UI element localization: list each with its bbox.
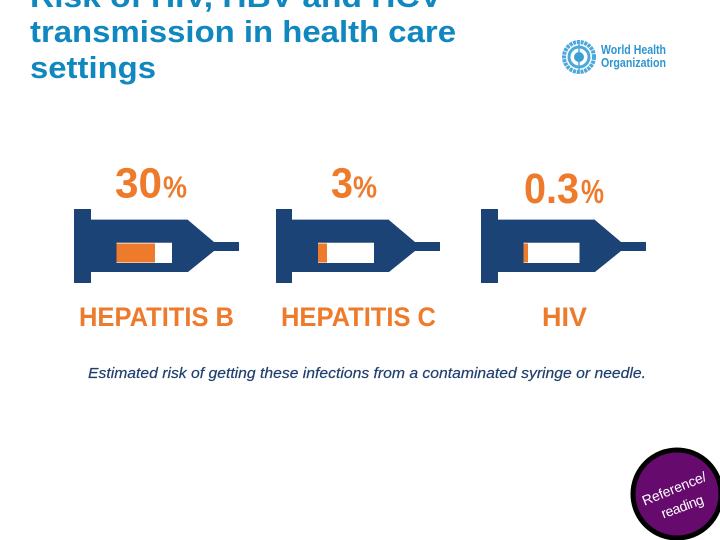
label: HIV: HIV: [542, 302, 587, 332]
icon: syringe 0.3% filled: [481, 209, 646, 283]
percentage: 30%: 30: [115, 160, 162, 208]
icon: World Health Organization logo: Organization: [601, 56, 666, 70]
percentage: 30%: [115, 160, 187, 208]
panel: hepatitis C: [276, 160, 440, 332]
icon: World Health Organization logo: World Health: [601, 43, 666, 57]
percentage: 30%: %: [163, 170, 187, 204]
badge: reference/reading: Reference/: [640, 468, 709, 509]
panel: hepatitis B: [74, 160, 239, 332]
icon: syringe 3% filled: [276, 209, 440, 283]
badge: reference/reading: [633, 450, 720, 538]
icon: World Health Organization logo: [564, 40, 666, 74]
percentage: 3%: [331, 160, 377, 208]
percentage: 0.3%: %: [581, 173, 604, 210]
icon: syringe 30% filled: [74, 209, 239, 283]
title: [30, 0, 456, 85]
label: hepatitis B: HEPATITIS B: [79, 302, 234, 332]
percentage: 3%: 3: [331, 160, 353, 208]
title: settings: [30, 50, 156, 85]
panel: HIV: [481, 165, 646, 332]
percentage: 3%: %: [353, 170, 377, 204]
percentage: 0.3%: 0.3: [524, 165, 579, 213]
label: hepatitis C: HEPATITIS C: [281, 302, 436, 332]
caption: Estimated risk of getting these infections from a contaminated syringe or needle.: [88, 365, 646, 382]
title: transmission in health care: [30, 14, 456, 49]
badge: reference/reading: reading: [659, 491, 706, 521]
